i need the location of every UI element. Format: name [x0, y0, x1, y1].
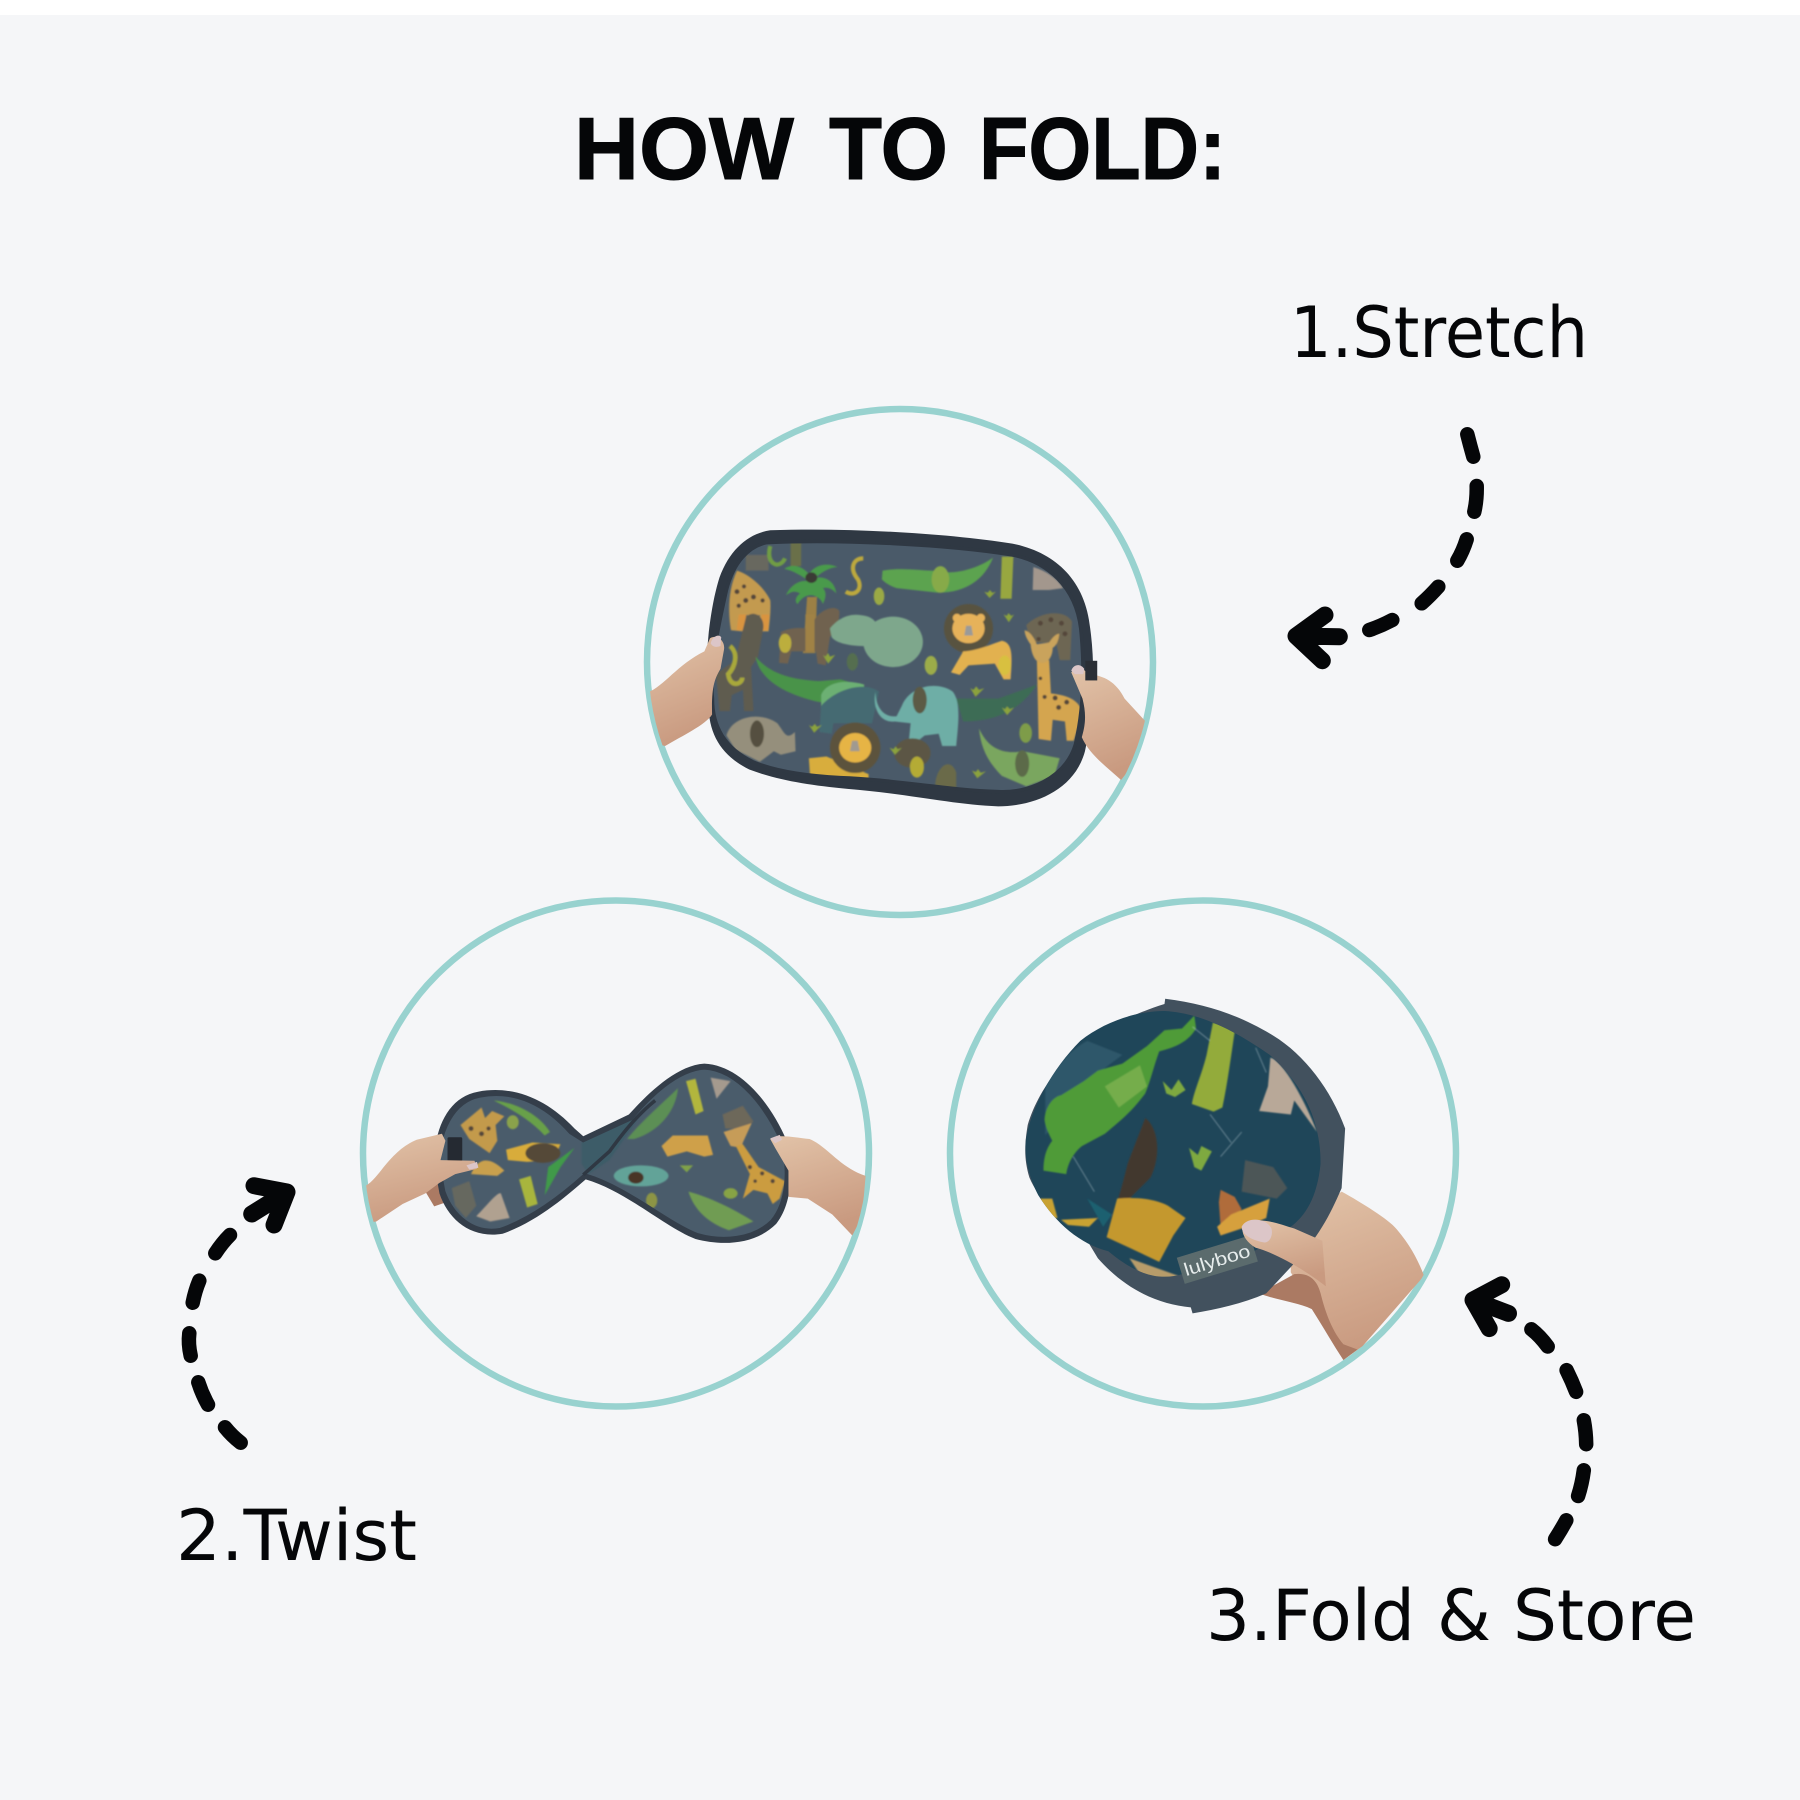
hippo [863, 617, 923, 667]
fabric inner edge [438, 1067, 787, 1239]
brand tab [448, 1137, 462, 1161]
giraffe right [1037, 660, 1082, 741]
folded shade fabric and animals [1021, 1006, 1329, 1286]
title: TO [829, 99, 948, 198]
ring: step 1 [647, 409, 1153, 915]
arrow: step 2 [189, 1186, 287, 1443]
hand: left back fingers [425, 1181, 446, 1206]
brand label [1177, 1235, 1258, 1284]
lion lower [809, 757, 869, 785]
lion upper [944, 604, 993, 653]
crocodile lower [979, 728, 1060, 786]
photo: twisted sunshade with hands [364, 1062, 866, 1248]
dark elephant [819, 687, 879, 734]
palm tree [803, 597, 817, 653]
sunshade fabric with jungle animals [714, 543, 1082, 790]
crocodile top [882, 558, 993, 593]
step 2 label: 2.Twist [176, 1495, 417, 1577]
panel: step 2 twist [363, 900, 869, 1406]
arrow: step 3 [1473, 1285, 1586, 1539]
blue elephant [875, 686, 958, 746]
nail [1242, 1220, 1272, 1243]
panel: step 3 fold and store [950, 900, 1456, 1406]
hand: behind the shade [1259, 1192, 1424, 1360]
bear [779, 608, 839, 665]
hands [364, 1134, 866, 1236]
leopard right [1026, 613, 1072, 660]
twist seam [583, 1100, 655, 1175]
ring: step 3 [950, 900, 1456, 1406]
sunshade border [707, 530, 1093, 806]
hands [644, 636, 1149, 780]
title [574, 99, 1226, 198]
twisted shade border [434, 1064, 791, 1243]
folded shade border [1025, 999, 1345, 1313]
brand tab [1085, 661, 1097, 680]
twisted shade fabric and animals [440, 1070, 785, 1237]
arrow: step 1 [1296, 434, 1477, 661]
bear lower [894, 738, 931, 768]
step 3 label: 3.Fold & Store [1206, 1575, 1696, 1657]
fabric inner edge [712, 542, 1083, 792]
title: HOW [574, 99, 794, 198]
crocodile middle [755, 657, 848, 703]
brand label: lulyboo [1181, 1240, 1253, 1280]
step 1 label: 1.Stretch [1290, 292, 1588, 374]
title: FOLD: [979, 99, 1226, 198]
panel: step 1 stretch [644, 409, 1153, 915]
hand: thumb [1242, 1221, 1326, 1286]
photo: stretched sunshade with hands [644, 530, 1149, 811]
ring: step 2 [363, 900, 869, 1406]
grey elephant [726, 717, 796, 762]
photo: folded sunshade with hand [1021, 999, 1424, 1360]
